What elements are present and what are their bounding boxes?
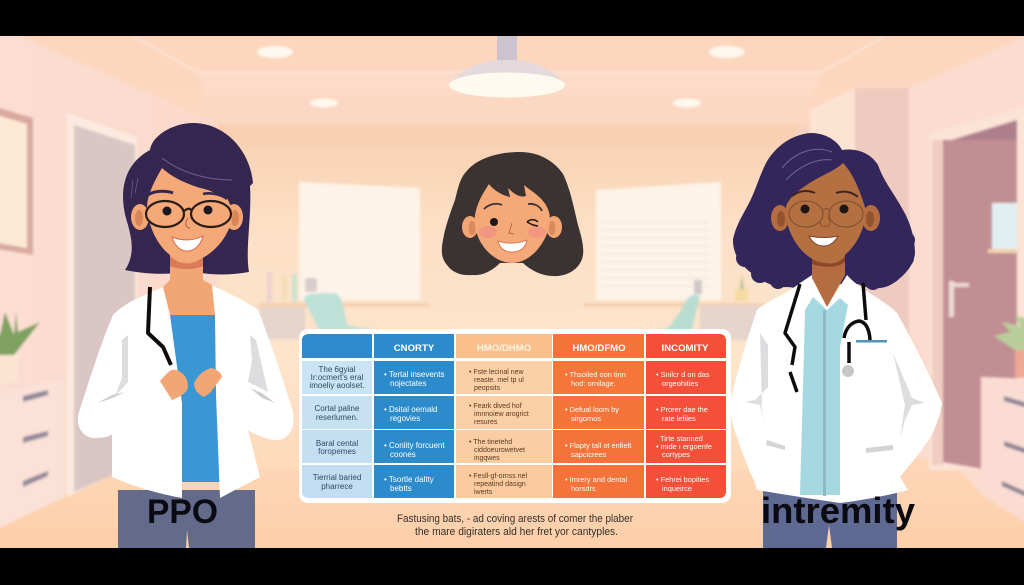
mouth [498,240,527,252]
cheeks [479,226,497,238]
column: HMO/DFMO: • Defual loom by [565,405,619,414]
column: INCOMITY: • Snilcr d on das [656,370,710,379]
column: HMO/DHMO: repeatind dasign [474,481,526,488]
lab coat [78,287,182,498]
left wall [0,20,218,540]
caption text: the mare digiraters ald her fret yor cantyples. [415,526,618,538]
column: INCOMITY: Tirte stanned [660,434,703,443]
column: labels: Ir:ocmert's eral [311,373,364,382]
column: HMO/DHMO: ciddoeurowetvet [474,447,525,454]
smile [809,236,838,246]
column: INCOMITY: cortypes [662,450,690,459]
column: CNORTY: • Tsortle daltty [384,475,434,484]
trousers [763,490,897,548]
brows [792,191,815,196]
hair [442,152,583,276]
column: CNORTY: regovies [390,414,420,423]
column: HMO/DHMO [456,334,552,498]
sleeve shadows [745,333,768,425]
column: labels: reserlumen. [316,413,358,422]
column: labels: imoeliy aoolset. [309,381,365,390]
face [147,168,232,262]
counter left [260,307,305,339]
trousers [118,490,255,548]
column: HMO/DHMO: peopsits [474,385,501,392]
column: HMO/DFMO: horsdrs [571,484,596,493]
back-left whiteboard [299,182,420,300]
column: INCOMITY: • Prorer dae the [656,405,708,414]
column: HMO/DFMO: • Flapty tall ot enfielt [565,441,631,450]
nose [820,217,830,226]
column: HMO/DFMO: sapcicrees [571,450,607,459]
glasses [146,201,231,227]
character: PPO doctor [78,123,294,548]
column: CNORTY: coones [390,450,416,459]
column: INCOMITY: orgeohities [662,379,698,388]
brows [484,204,502,209]
open eye [490,218,498,226]
winking eye [527,220,538,226]
hair strands [782,149,832,180]
hands [160,370,188,400]
ears [131,204,149,230]
column: INCOMITY: • mide ı ergoenfe [656,442,712,451]
column: HMO/DHMO: reaste. mel tp ul [474,377,524,384]
column: INCOMITY: INCOMITY [662,343,709,354]
nose [186,218,190,228]
brows [148,191,173,195]
counter right [700,305,760,340]
column: CNORTY: • Dsital oemald [384,405,438,414]
column: HMO/DHMO: resures [474,419,498,426]
ears [462,216,478,238]
shelf and books [992,203,1017,250]
column: HMO/DHMO: ingqwes [474,455,500,462]
column: labels: The 6gyial [319,365,356,374]
hair strands [162,158,232,180]
dental chair right [648,295,700,338]
column: CNORTY [374,334,454,498]
column: INCOMITY: inqueirce [662,484,692,493]
column: HMO/DHMO: • Fesll-gf-ornss nel [469,473,528,480]
column: labels: pharrece [321,482,353,491]
smile [172,236,203,251]
right wall pillars [797,124,810,470]
eyes [800,204,810,214]
nose [509,223,514,234]
comparison table [299,329,731,503]
label: PPO: PPO [147,493,218,531]
column: labels: Tierrial baried [313,473,361,482]
column: CNORTY: • Tertal insevents [384,370,444,379]
column: HMO/DFMO [553,334,644,498]
pocket slits [766,440,785,450]
column: INCOMITY: • Fehrei bopities [656,475,709,484]
small plant [735,275,750,296]
neck [812,250,845,307]
table card [299,329,731,503]
column: HMO/DFMO: HMO/DFMO [572,343,626,354]
caption text: Fastusing bats, - ad coving arests of comer the plaber [397,513,633,525]
floor [0,458,1024,575]
column: HMO/DFMO: • Imrery and dental [565,475,628,484]
right plant [1015,350,1024,378]
column: CNORTY: bebtts [390,484,412,493]
stethoscope [785,283,870,392]
ceiling lamp [449,36,565,98]
back wall [215,124,805,470]
column: labels [302,334,372,498]
column: labels: Cortal paline [315,404,360,413]
picture frame [0,102,33,255]
back-right whiteboard [596,182,721,300]
right door [929,100,1024,470]
caption text [397,513,633,538]
sleeve shadows [115,335,128,396]
face [475,184,550,263]
column: HMO/DFMO: sirgomos [571,414,601,423]
right drawers [981,377,1024,530]
column: CNORTY: • Conlity forcuent [384,441,445,450]
ceiling lights [257,46,745,108]
column: HMO/DHMO: iwerts [474,489,493,496]
column: HMO/DHMO: HMO/DHMO [477,343,532,354]
left drawers [0,378,65,537]
column: CNORTY: CNORTY [394,343,435,354]
label: intremity: intremity [761,490,915,531]
curly hair [733,133,915,290]
column: labels: Baral cental [316,439,358,448]
eyes [162,206,172,216]
blue shirt [170,315,220,482]
column: INCOMITY [646,334,726,498]
column: HMO/DHMO: imnnoiew arogrict [474,411,529,418]
ears [771,205,789,231]
neck and chest [163,250,216,318]
character: intremity doctor [730,133,942,548]
character: smiling winking head [442,152,583,276]
stethoscope [148,287,171,365]
lab coat [730,275,942,503]
column: HMO/DFMO: hod: ornilage. [571,379,616,388]
column: labels: foropemes [318,447,356,456]
ceiling [0,0,1024,130]
glasses [789,201,863,227]
face [786,163,865,263]
column: CNORTY: nojectates [390,379,426,388]
dental chair left [304,293,372,336]
hair [123,123,253,274]
column: HMO/DHMO: • Feark dived hof [469,403,522,410]
column: HMO/DFMO: • Thsoiled oon tinn [565,370,626,379]
column: HMO/DHMO: • Fste lecinal new [469,369,525,376]
breast pocket [856,340,887,342]
column: INCOMITY: rate lefiles [662,414,696,423]
forelock [203,186,232,200]
column: HMO/DHMO: • The tinetehd [469,439,512,446]
teal shirt [800,297,848,495]
left plant [0,353,18,389]
left door [67,113,137,497]
